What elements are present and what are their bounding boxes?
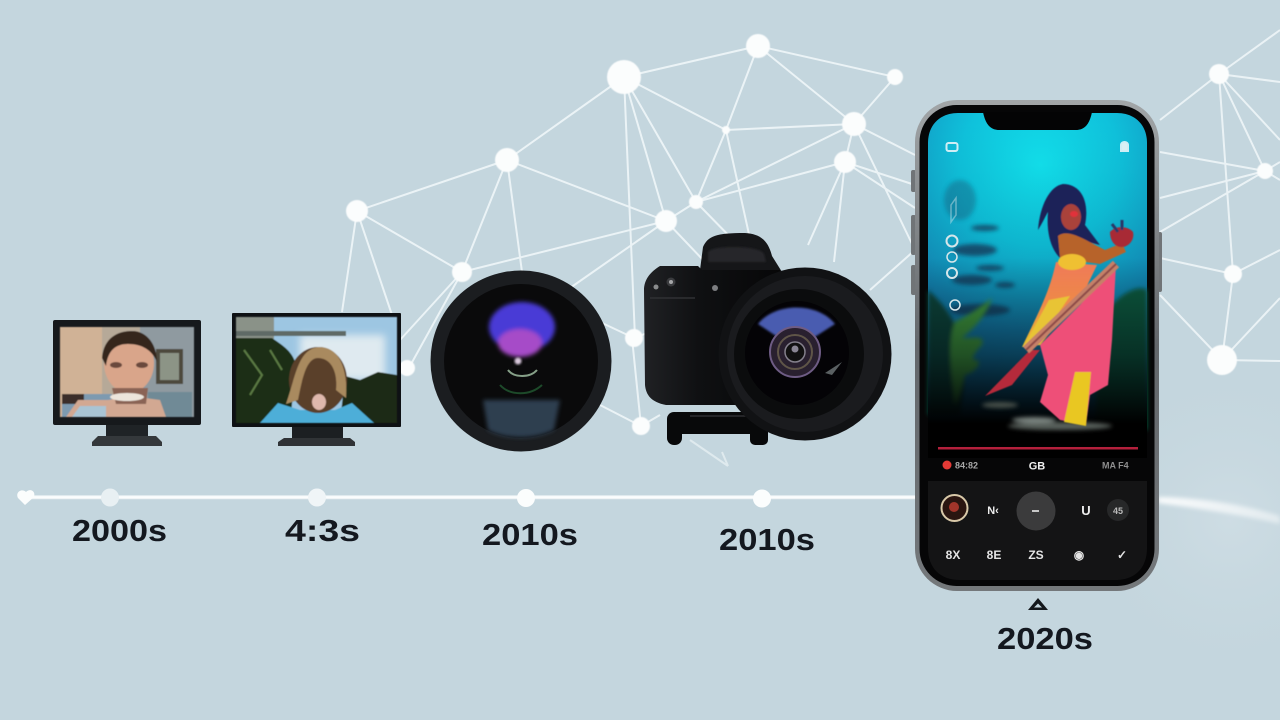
timeline marker: 4:3s: [308, 488, 326, 506]
camera prism: [700, 233, 782, 272]
phone side buttons: [911, 170, 1162, 295]
network graph: right: [1160, 30, 1280, 375]
timeline marker: 2000s: [101, 488, 119, 506]
monitor: 4:3 video: [232, 313, 401, 446]
dancer figure: [985, 184, 1133, 426]
phone notch: [983, 112, 1092, 130]
phone player status row: GB: [1029, 460, 1045, 472]
phone frame: [915, 100, 1159, 591]
label: 4:3s: 4:3s: [285, 513, 360, 548]
phone video screen: [928, 113, 1147, 458]
label: 2020s: 2020s: [997, 621, 1093, 656]
lens: standalone camera lens: [430, 270, 612, 452]
triangle marker for phone: [1028, 598, 1048, 610]
camera body: [644, 266, 780, 405]
camera big lens: [718, 268, 892, 440]
lens blue wedge: [758, 308, 835, 340]
fade to black at bottom: [928, 113, 1147, 458]
phone overlay icons: top: [946, 142, 1128, 151]
phone control buttons: row two: [946, 548, 1127, 562]
lens reflections: [483, 302, 560, 438]
phone overlay icons: left column: [946, 198, 960, 310]
seaweed plants: [928, 288, 1147, 430]
phone progress bar: [938, 447, 1138, 450]
label: 2010s second: 2010s: [719, 522, 815, 557]
timeline marker: start: [17, 490, 34, 505]
label: 2000s: 2000s: [72, 513, 167, 548]
monitor bezel: [232, 313, 401, 427]
network nodes: [346, 34, 903, 435]
timeline marker: 2010s first: [517, 489, 535, 507]
date labels: [72, 513, 1093, 656]
timeline: [17, 488, 1280, 524]
phone control buttons: row two: ZS: [1028, 548, 1044, 562]
phone control buttons: row two: ✓: [1117, 548, 1127, 562]
timeline marker: 2010s second: [753, 490, 771, 508]
phone control buttons: row one: U: [1081, 503, 1091, 518]
phone control panel: [928, 481, 1147, 580]
phone player status row: [942, 460, 1129, 472]
smartphone: [911, 100, 1162, 591]
phone control buttons: row two: 8E: [987, 548, 1001, 562]
phone control buttons: row one: 45: [1113, 506, 1123, 516]
phone control buttons: row one: [942, 492, 1129, 530]
underwater fish silhouettes: [944, 180, 1015, 316]
phone control buttons: row two: ◉: [1074, 548, 1085, 562]
monitor screen: man at home: [60, 327, 194, 417]
monitor stand: [278, 426, 355, 446]
phone control buttons: row two: 8X: [946, 548, 960, 562]
camera dials: [650, 278, 718, 298]
monitor stand: [92, 424, 162, 446]
network graph: centre: [342, 34, 915, 466]
label: 2010s first: 2010s: [482, 517, 578, 552]
phone player status row: 84:82: [955, 460, 978, 470]
camera lower mount: [667, 412, 769, 445]
monitor screen: person outdoors: [236, 317, 397, 423]
monitor bezel: [53, 320, 201, 425]
lens centre rings: [770, 327, 820, 377]
monitor: 2000s webcam video: [53, 320, 201, 446]
phone player status row: MA F4: [1102, 460, 1129, 470]
rocks: [982, 402, 1112, 430]
DSLR camera: [644, 233, 892, 445]
phone control buttons: row one: N‹: [987, 505, 999, 517]
